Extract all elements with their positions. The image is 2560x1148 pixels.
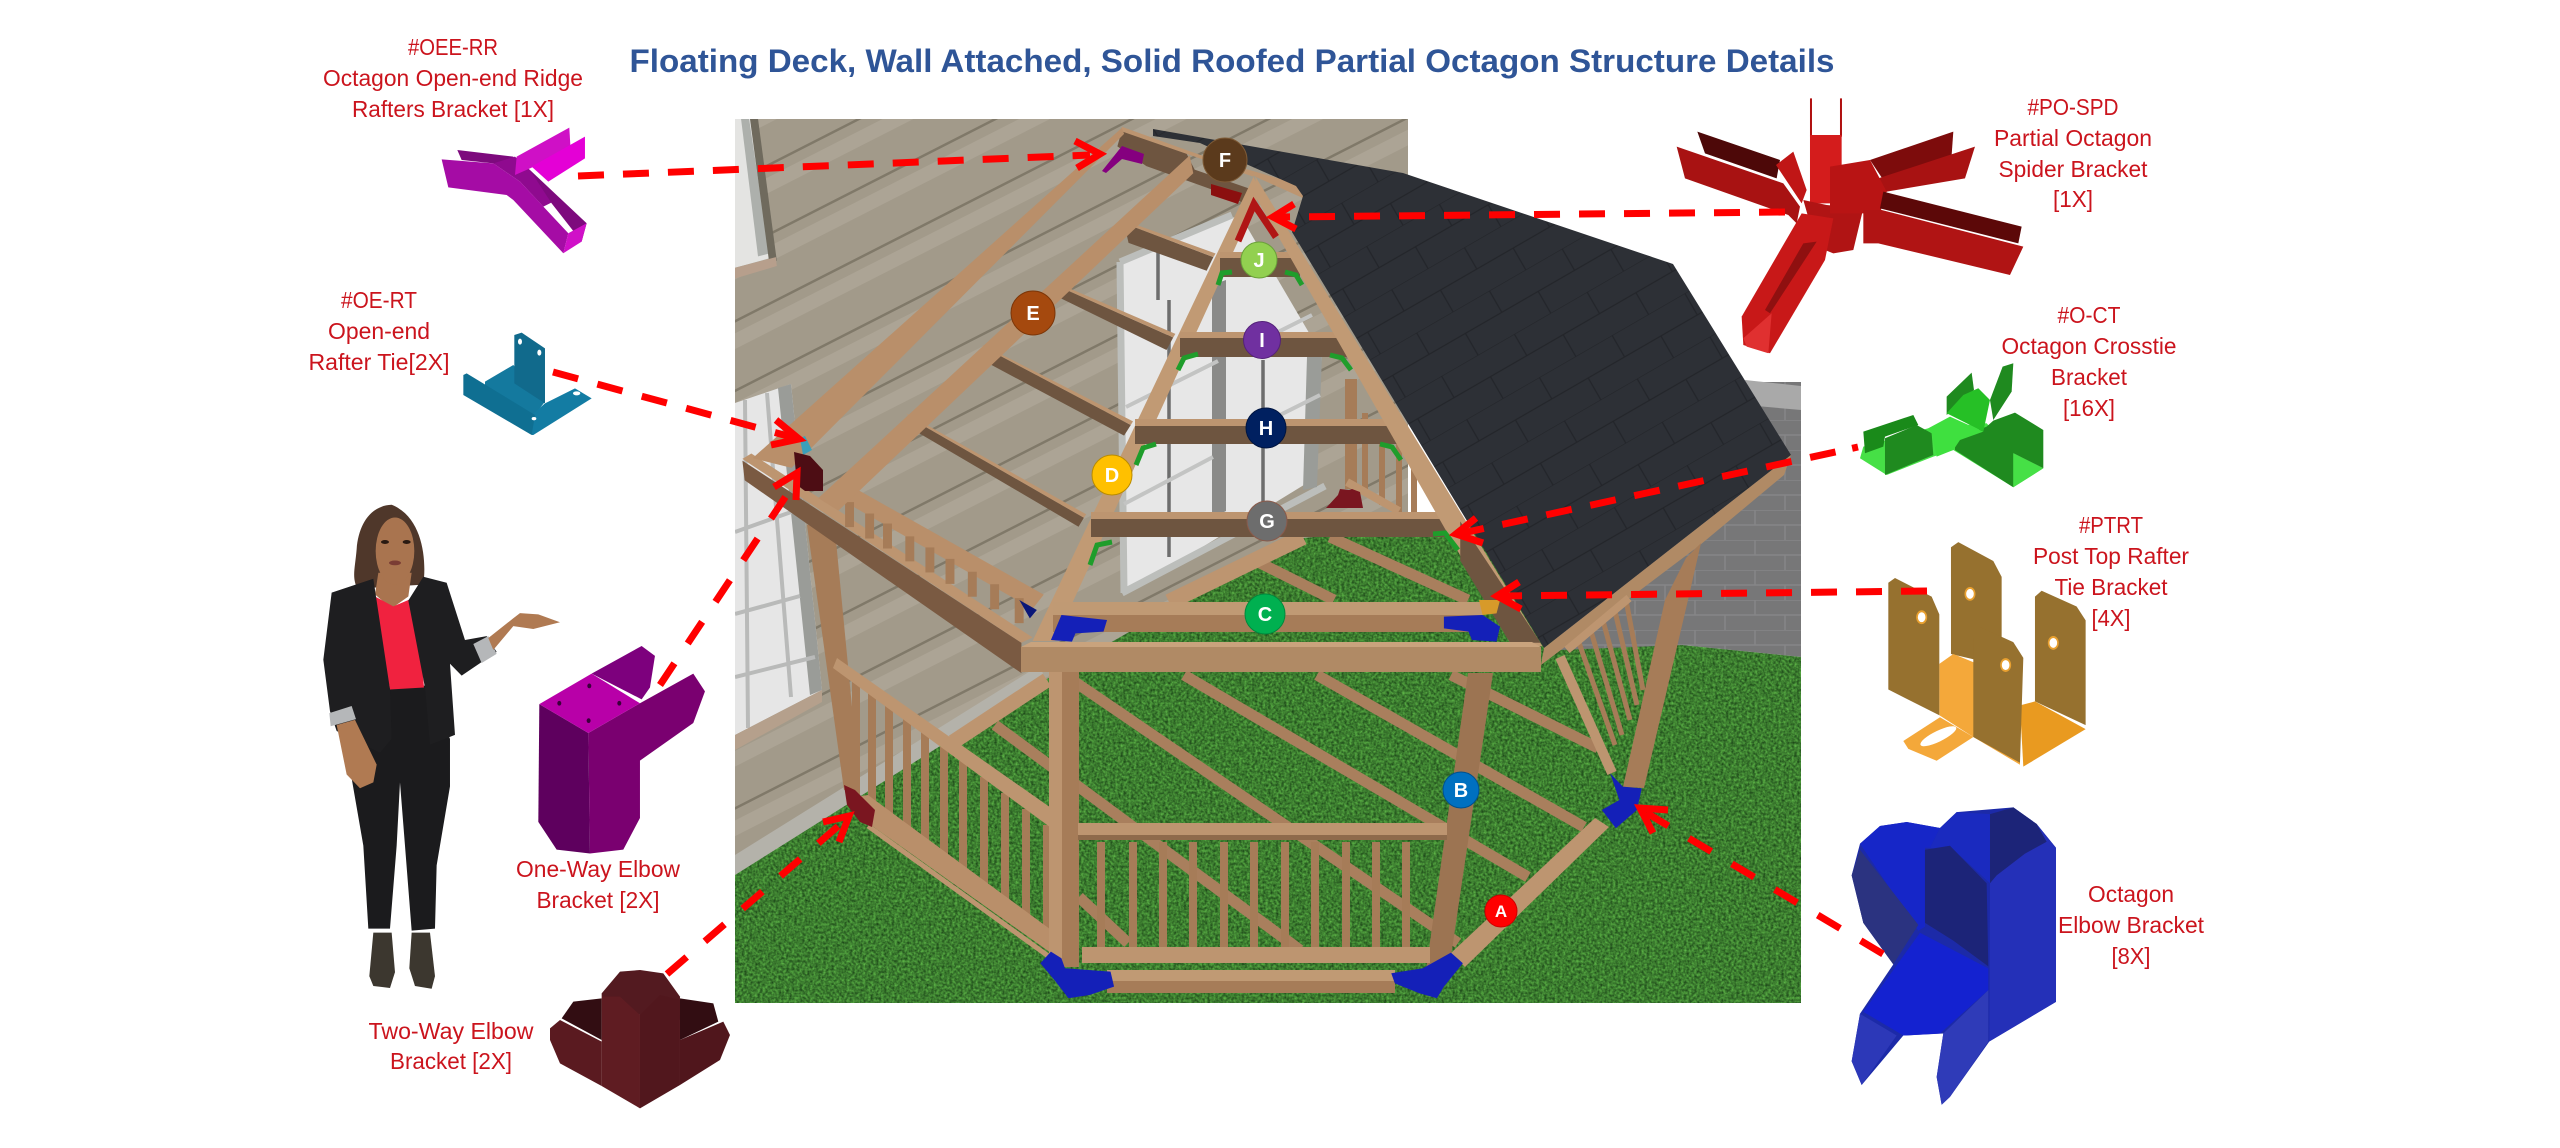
left rear post xyxy=(807,520,852,790)
circle B xyxy=(1443,772,1479,808)
blue bracket roof left xyxy=(1019,600,1107,642)
label: O-CT xyxy=(2002,302,2176,421)
central window xyxy=(1120,215,1325,595)
circle H xyxy=(1246,408,1286,448)
circle H: H xyxy=(1259,418,1273,440)
arrow: ridge rafters bracket to scene xyxy=(578,141,1100,176)
label: octagon elbow: Octagon xyxy=(2088,881,2174,907)
two-way elbow bracket at wall xyxy=(844,785,875,827)
arrow: rafter tie to scene xyxy=(553,372,799,445)
arrow: one-way elbow to scene xyxy=(660,473,797,685)
hair back xyxy=(354,505,424,589)
two-way elbow in scene (back) xyxy=(1326,489,1363,508)
circle D xyxy=(1092,455,1132,495)
front header beam xyxy=(1021,642,1541,672)
far right post and railing xyxy=(1560,543,1701,788)
blue elbow bracket front right xyxy=(1391,953,1463,998)
upper left window xyxy=(735,119,777,279)
label: one-way elbow xyxy=(516,856,680,913)
icon: person presenter xyxy=(323,505,560,989)
label: octagon elbow xyxy=(2058,881,2205,969)
back right railing xyxy=(1345,379,1414,525)
right hip rafter xyxy=(1242,168,1543,646)
circle C: C xyxy=(1258,604,1272,626)
front railing xyxy=(1078,823,1447,993)
open-end tie and elbow in scene xyxy=(794,436,823,491)
blue brackets in scene xyxy=(1019,600,1642,998)
label: PTRT: Post Top Rafter xyxy=(2033,543,2189,569)
arrow: spider bracket to scene xyxy=(1273,204,1785,229)
icon: red spider bracket xyxy=(1677,98,2023,353)
circle E xyxy=(1011,291,1055,335)
label: PTRT xyxy=(2033,512,2189,631)
lawn xyxy=(735,520,1801,1003)
spider left arms and channel xyxy=(1677,98,1863,353)
circle D: D xyxy=(1105,465,1119,487)
label: two-way elbow xyxy=(368,1018,534,1074)
label: PO-SPD: Partial Octagon xyxy=(1994,125,2152,151)
label: one-way elbow: One-Way Elbow xyxy=(516,856,680,882)
open-end ties xyxy=(906,220,1216,527)
house wall siding xyxy=(735,119,1408,875)
hands and forearms xyxy=(337,613,560,788)
crosstie brackets in scene xyxy=(1090,272,1458,565)
blue elbow bracket right xyxy=(1602,773,1642,828)
circle C xyxy=(1245,594,1285,634)
icon: teal open-end rafter tie xyxy=(463,333,592,435)
facial features xyxy=(381,540,411,565)
cross ties xyxy=(1053,252,1483,632)
circle E: E xyxy=(1026,303,1040,325)
lower left window xyxy=(735,384,822,750)
open-end rafters and ridge xyxy=(753,127,1260,641)
circle I xyxy=(1244,322,1280,358)
shoes xyxy=(369,933,435,989)
black trousers xyxy=(352,685,450,931)
circle B: B xyxy=(1454,780,1468,802)
label: OE-RT: Rafter Tie[2X] xyxy=(308,349,450,375)
circle J xyxy=(1241,242,1277,278)
icon: green crosstie bracket xyxy=(1860,363,2043,487)
circle J: J xyxy=(1253,250,1265,272)
arrow: post top tie to scene xyxy=(1497,582,1927,609)
floor joists xyxy=(953,537,1598,950)
circle I: I xyxy=(1259,330,1265,352)
red top xyxy=(375,597,424,689)
label: O-CT: Bracket xyxy=(2051,364,2128,390)
label: PO-SPD: [1X] xyxy=(2053,186,2093,212)
icon: orange post top rafter tie bracket xyxy=(1888,542,2086,767)
circle A xyxy=(1485,895,1517,927)
label: O-CT: [16X] xyxy=(2063,395,2115,421)
stone wall xyxy=(1540,380,1801,660)
label: two-way elbow: Two-Way Elbow xyxy=(368,1018,534,1044)
title: Floating Deck, Wall Attached, Solid Roofed Partial Octagon Structure Details xyxy=(630,43,1834,79)
roof fascia xyxy=(1541,455,1791,665)
arrow: two-way elbow to scene xyxy=(667,816,849,974)
front posts xyxy=(1049,672,1493,970)
label: PTRT: [4X] xyxy=(2092,605,2130,631)
panel: deck scene xyxy=(735,119,1801,1003)
foundation strip xyxy=(735,665,1045,875)
arrow: crosstie bracket to scene xyxy=(1456,447,1858,543)
label: O-CT: #O-CT xyxy=(2058,302,2120,328)
label: OEE-RR xyxy=(323,34,583,122)
icon: magenta ridge rafters bracket xyxy=(442,128,587,253)
label: PO-SPD: #PO-SPD xyxy=(2028,94,2118,120)
label: OEE-RR: Rafters Bracket [1X] xyxy=(352,96,554,122)
label circles xyxy=(1011,138,1517,927)
label: one-way elbow: Bracket [2X] xyxy=(536,887,660,913)
arrow: octagon elbow to scene xyxy=(1640,808,1883,954)
label: PO-SPD: Spider Bracket xyxy=(1998,156,2148,182)
bottom right beam A xyxy=(1451,818,1609,967)
label: PO-SPD xyxy=(1994,94,2152,212)
left wall top plate and rail xyxy=(742,454,1044,673)
label: OE-RT xyxy=(308,287,450,375)
roof xyxy=(1153,129,1791,648)
shirt cuffs xyxy=(329,636,497,726)
purple ridge bracket in scene xyxy=(1102,146,1144,173)
circle A: A xyxy=(1495,902,1507,921)
circle G xyxy=(1247,501,1287,541)
spider right arms xyxy=(1830,132,2023,275)
circle G: G xyxy=(1259,511,1275,533)
circle F: F xyxy=(1219,150,1231,172)
label: two-way elbow: Bracket [2X] xyxy=(390,1048,512,1074)
circle F xyxy=(1203,138,1247,182)
icon: dark red two-way elbow bracket xyxy=(550,970,730,1108)
label: O-CT: Octagon Crosstie xyxy=(2002,333,2176,359)
icon: blue octagon elbow bracket xyxy=(1852,807,2056,1105)
label: OEE-RR: #OEE-RR xyxy=(408,34,498,60)
blazer xyxy=(323,577,497,753)
label: OE-RT: #OE-RT xyxy=(341,287,417,313)
neck and face xyxy=(375,517,414,608)
label: octagon elbow: [8X] xyxy=(2112,943,2150,969)
spider bracket in scene xyxy=(1211,184,1276,241)
blue bracket roof right xyxy=(1444,600,1500,642)
label: OE-RT: Open-end xyxy=(328,318,430,344)
left angled railing xyxy=(833,658,1058,958)
label: PTRT: Tie Bracket xyxy=(2054,574,2168,600)
label: octagon elbow: Elbow Bracket xyxy=(2058,912,2205,938)
icon: purple one-way elbow bracket xyxy=(538,646,705,854)
blue elbow bracket front left xyxy=(1040,952,1114,998)
label: PTRT: #PTRT xyxy=(2079,512,2143,538)
label: OEE-RR: Octagon Open-end Ridge xyxy=(323,65,583,91)
